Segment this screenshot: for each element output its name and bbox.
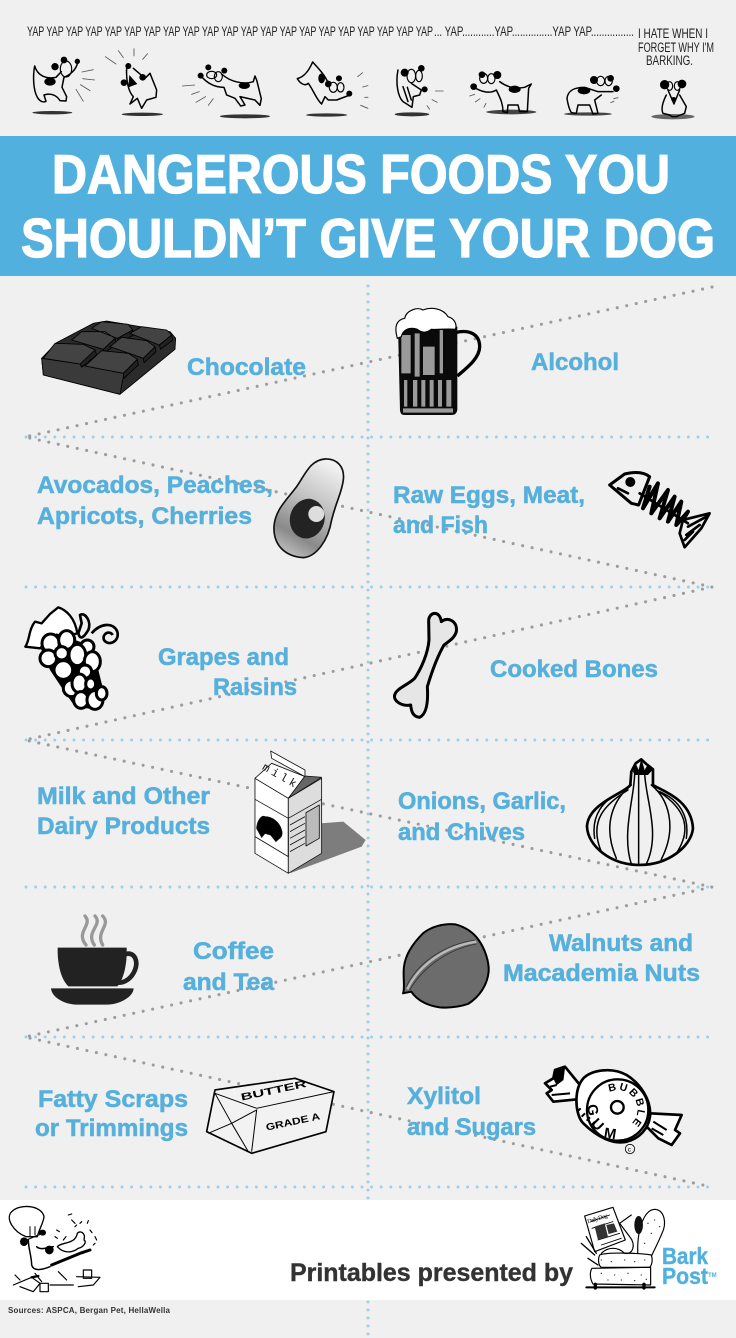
coffee item (51, 916, 275, 1005)
alcohol item (396, 308, 619, 415)
dog 4 (297, 62, 368, 117)
grapes item (25, 607, 297, 710)
icon: milk carton: milk (260, 762, 298, 791)
icon: butter: BUTTER (240, 1079, 307, 1104)
onions item (398, 758, 693, 865)
text: printables presented by: Printables presented by (290, 1259, 573, 1287)
comic text: yap sequence: ... YAP............YAP...............YAP YAP................ (434, 24, 634, 39)
icon: bubble gum: GUM (588, 1104, 616, 1140)
sources: Sources: ASPCA, Bergan Pet, HellaWella (8, 1306, 171, 1315)
chocolate item (42, 321, 306, 394)
fatty scraps item (35, 1078, 334, 1153)
comic strip: barking dog (27, 24, 714, 119)
label: walnuts and: Walnuts and (549, 930, 693, 957)
avocados item (37, 459, 344, 558)
label: chocolate: Chocolate (187, 354, 306, 381)
xylitol item (406, 1065, 683, 1154)
title: DANGEROUS FOODS YOU (52, 143, 670, 205)
label: coffee: Coffee (193, 938, 274, 965)
label: milk and other: Milk and Other (37, 783, 210, 810)
gray dotted zigzag (25, 287, 712, 1187)
label: cooked bones: Cooked Bones (490, 656, 658, 683)
dog 3 (182, 64, 270, 118)
icon: chef dog (9, 1206, 100, 1292)
cooked bones item (394, 613, 658, 717)
icon: milk carton (255, 751, 366, 873)
label: and chives: and Chives (398, 819, 525, 846)
icon: fish skeleton (610, 472, 710, 547)
icon: bubble gum (544, 1065, 683, 1154)
icon: bubble gum: BUBBLE (608, 1082, 645, 1128)
title (21, 143, 715, 269)
steam (82, 916, 105, 945)
logo: bark post: TM (708, 1273, 717, 1279)
label: avocados, peaches: Avocados, Peaches, (37, 472, 273, 499)
walnuts item (403, 924, 700, 1008)
icon: grapes (25, 607, 118, 710)
comic text: speech (638, 26, 714, 68)
dogs row right (395, 65, 695, 119)
dog 7 (564, 75, 620, 116)
label: fatty scraps: Fatty Scraps (38, 1086, 188, 1113)
icon: butter (207, 1078, 334, 1153)
label: apricots, cherries: Apricots, Cherries (37, 503, 252, 530)
title banner (0, 136, 736, 276)
footer band (0, 1200, 736, 1300)
icon: bone (394, 613, 456, 717)
label: xylitol: Xylitol (407, 1083, 481, 1110)
dog 6 (470, 71, 536, 114)
comic text: speech: BARKING. (646, 53, 693, 68)
icon: avocado (274, 459, 344, 558)
logo: bark post: Bark (662, 1243, 708, 1269)
logo: bark post (662, 1243, 717, 1289)
label: onions, garlic: Onions, Garlic, (398, 788, 566, 815)
logo: bark post: Post (662, 1263, 708, 1289)
label: raw eggs, meat: Raw Eggs, Meat, (393, 482, 585, 509)
label: and sugars: and Sugars (407, 1114, 536, 1141)
label: macadamia nuts: Macademia Nuts (503, 960, 700, 987)
label: alcohol: Alcohol (531, 349, 619, 376)
icon: beer mug (396, 308, 480, 415)
dog 1 (32, 57, 95, 114)
raw eggs item (393, 472, 710, 547)
blue dotted grid (26, 286, 710, 1338)
icon: onion (587, 758, 693, 865)
label: and tea: and Tea (183, 969, 275, 996)
label: dairy products: Dairy Products (37, 813, 210, 840)
dogs row left (32, 49, 368, 118)
icon: chocolate bar (42, 321, 176, 394)
icon: butter: GRADE A (265, 1111, 321, 1134)
icon: dog in armchair reading: Daily Dog (587, 1213, 608, 1225)
dog 5 (395, 65, 443, 116)
comic text: yap sequence: YAP YAP YAP YAP YAP YAP YAP YAP YAP YAP YAP YAP YAP YAP YAP YAP YAP YAP YAP YAP YAP (27, 24, 433, 39)
dog 8 (651, 80, 695, 119)
icon: walnut (403, 924, 489, 1008)
label: or trimmings: or Trimmings (35, 1115, 188, 1142)
icon: coffee cup (51, 916, 136, 1005)
icon: bubble gum: c (628, 1146, 632, 1153)
label: grapes and: Grapes and (158, 644, 289, 671)
label: and fish: and Fish (393, 512, 488, 539)
icon: dog in armchair reading (581, 1207, 665, 1288)
milk item (37, 751, 366, 873)
label: raisins: Raisins (213, 674, 297, 701)
dog 2 (105, 49, 163, 116)
comic text: speech: I HATE WHEN I (638, 26, 708, 41)
